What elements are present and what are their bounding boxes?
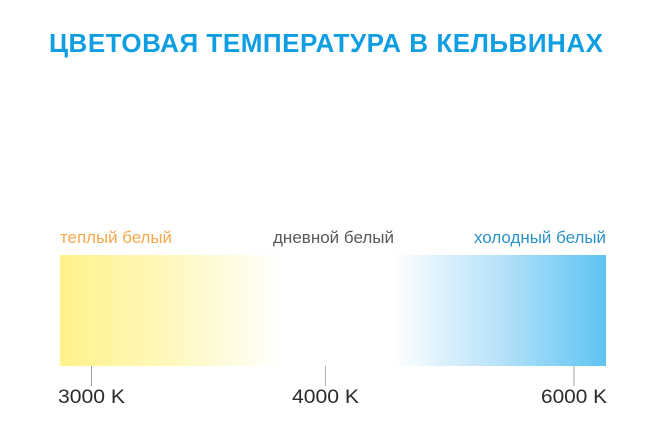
tick: 3000 K xyxy=(90,366,92,386)
tick: 6000 K xyxy=(573,366,575,386)
label: cool white: холодный белый xyxy=(474,229,606,247)
colour temperature gradient bar xyxy=(60,255,606,366)
title: ЦВЕТОВАЯ ТЕМПЕРАТУРА В КЕЛЬВИНАХ xyxy=(49,28,604,58)
scale value: 6000 K: 6000 K xyxy=(541,387,607,408)
warm gradient segment xyxy=(60,255,282,366)
tick: 4000 K xyxy=(324,366,326,386)
cool gradient segment xyxy=(392,255,606,366)
label: warm white: теплый белый xyxy=(60,229,172,247)
label: daylight white: дневной белый xyxy=(273,229,394,247)
scale value: 4000 K: 4000 K xyxy=(292,387,359,408)
scale value: 3000 K: 3000 K xyxy=(58,387,125,408)
